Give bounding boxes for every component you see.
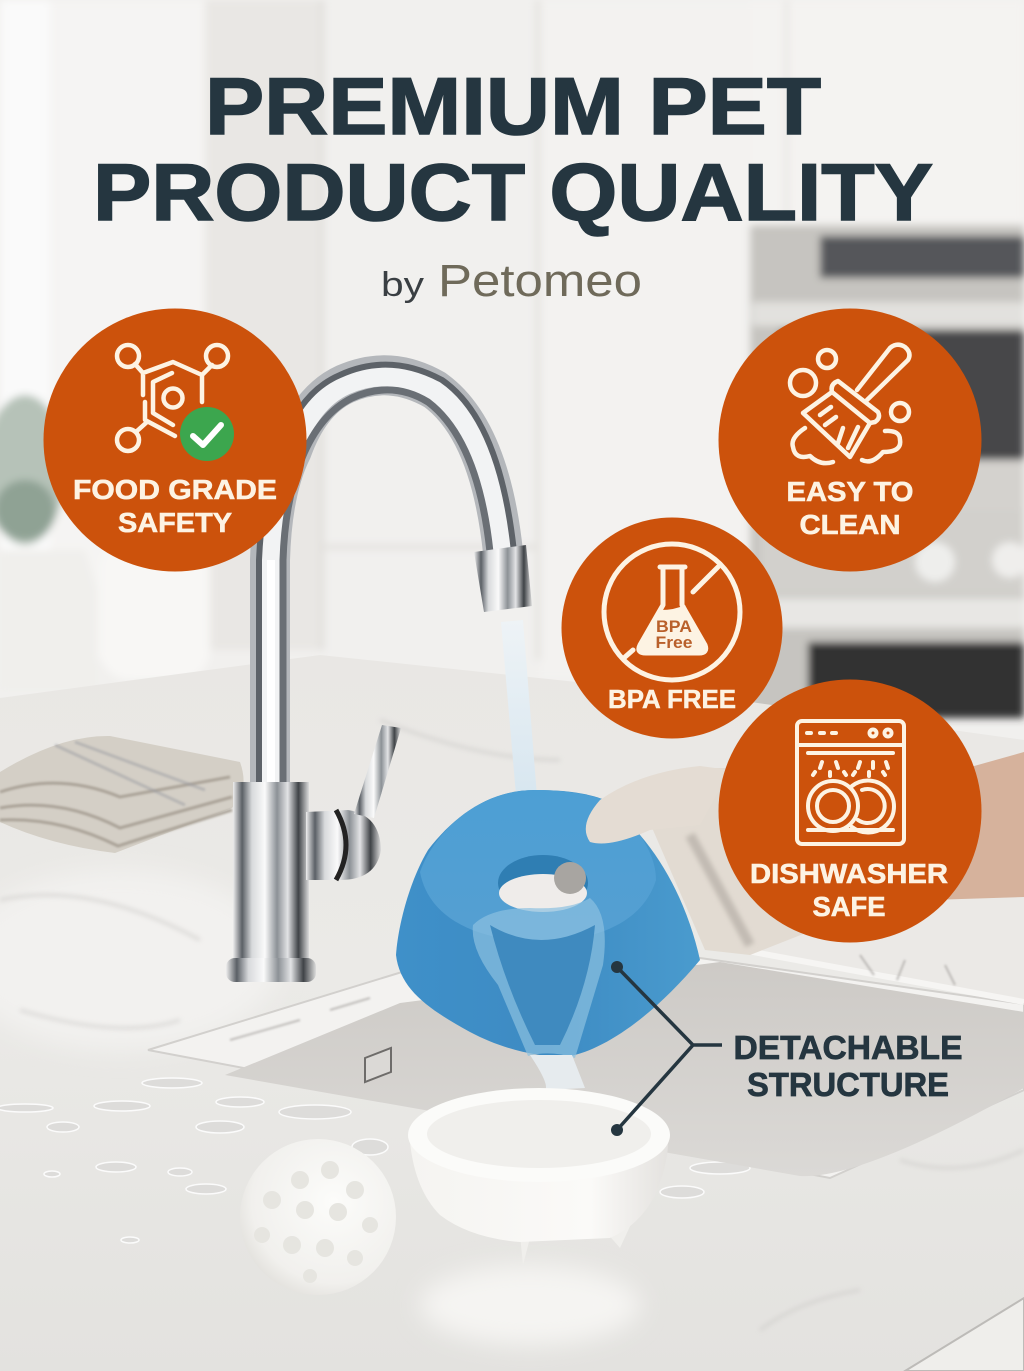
icon: dishwasher: [797, 721, 904, 844]
badge: dishwasher safe: SAFE: [812, 891, 886, 922]
oven: [750, 225, 1024, 715]
blue detachable top part: [396, 790, 700, 1090]
callout: detachable structure: [611, 961, 962, 1136]
icon: prohibited flask: [604, 544, 740, 680]
byline: Petomeo: [438, 255, 642, 306]
white bowl: [408, 1088, 670, 1265]
water through hole: [473, 898, 605, 1058]
arm and glove behind the blue part: [640, 752, 1024, 955]
badge: dishwasher safe: DISHWASHER: [750, 858, 948, 889]
callout: detachable structure: DETACHABLE: [734, 1029, 962, 1066]
towel: [0, 736, 244, 853]
badge: easy to clean: [718, 308, 982, 572]
badge: food grade safety: SAFETY: [118, 507, 232, 538]
title: [93, 62, 933, 238]
marble veins and water droplets on counter: [0, 720, 1024, 1371]
badge: bpa free: [562, 518, 782, 738]
white golf-textured ball: [240, 1139, 396, 1295]
icon: prohibited flask: BPA: [656, 618, 692, 636]
callout: detachable structure: STRUCTURE: [747, 1066, 949, 1103]
icon: molecule with check: [117, 345, 234, 461]
countertop: [0, 655, 1024, 1371]
callout leader lines: [611, 961, 722, 1136]
icon: green check: [180, 407, 234, 461]
badge: easy to clean: CLEAN: [800, 509, 900, 540]
badge: food grade safety: FOOD GRADE: [73, 474, 277, 505]
icon: brush with bubbles: [790, 345, 909, 463]
byline: [381, 255, 642, 306]
sink: [148, 897, 1024, 1178]
faucet: [226, 365, 532, 982]
badge: dishwasher safe: [718, 680, 982, 942]
badge: easy to clean: EASY TO: [786, 476, 914, 507]
title: PRODUCT QUALITY: [93, 148, 933, 238]
badge: food grade safety: [44, 308, 306, 572]
plant and vase: [0, 395, 65, 545]
water stream: [501, 620, 546, 910]
background: blurred kitchen: [0, 0, 1024, 740]
glove thumb over the blue part: [586, 766, 730, 844]
cabinet corner at bottom right: [905, 1298, 1024, 1371]
title: PREMIUM PET: [205, 62, 821, 152]
badge: bpa free: BPA FREE: [608, 684, 736, 714]
icon: prohibited flask: Free: [656, 634, 692, 652]
byline: by: [381, 266, 424, 304]
